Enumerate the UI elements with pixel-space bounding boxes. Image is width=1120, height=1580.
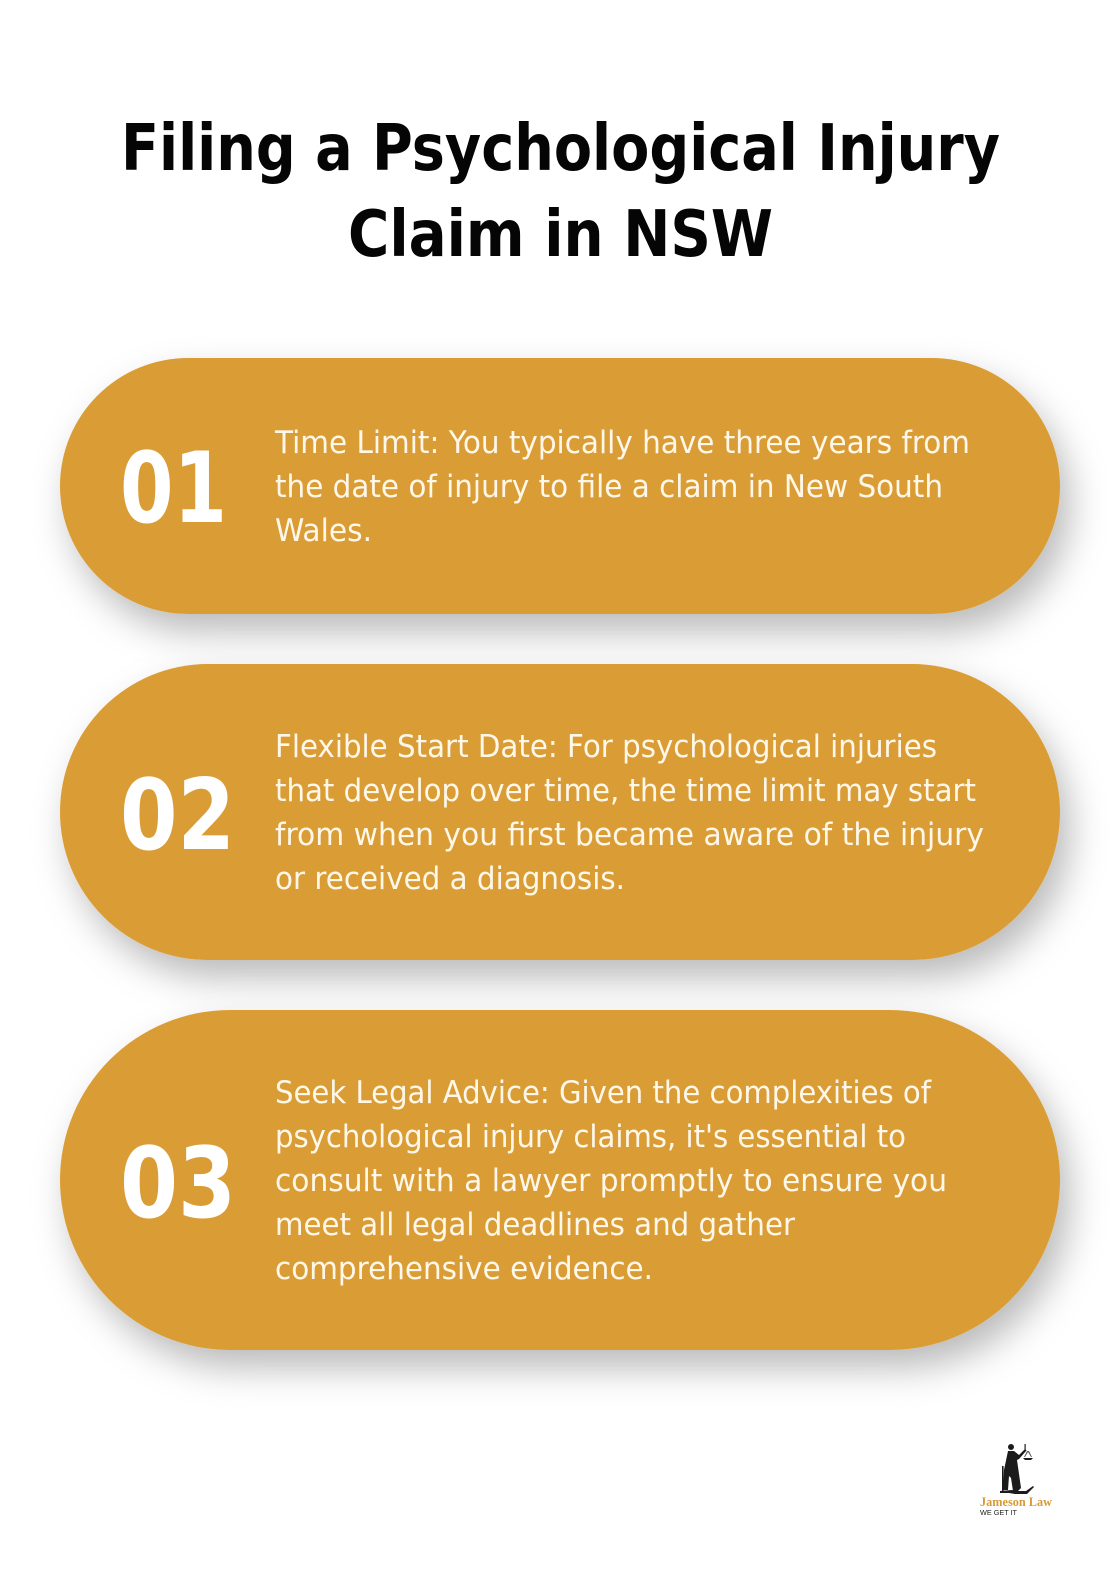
text block: time limit: Time Limit: You typically have three years from bbox=[274, 425, 970, 461]
text block: seek legal advice: psychological injury claims, it's essential to bbox=[275, 1119, 906, 1155]
logo name: Jameson Law bbox=[980, 1495, 1052, 1509]
text block: flexible start date: from when you first became aware of the injury bbox=[275, 817, 984, 853]
text block: flexible start date bbox=[275, 729, 984, 897]
text block: seek legal advice bbox=[275, 1075, 947, 1287]
title bbox=[121, 112, 1000, 272]
text block: flexible start date: Flexible Start Date: For psychological injuries bbox=[275, 729, 937, 765]
number 01: 01 bbox=[120, 432, 227, 546]
text block: flexible start date: or received a diagnosis. bbox=[275, 861, 625, 897]
text block: seek legal advice: comprehensive evidence. bbox=[275, 1251, 653, 1287]
text block: flexible start date: that develop over time, the time limit may start bbox=[275, 773, 976, 809]
text block: time limit bbox=[274, 425, 970, 549]
logo tagline: WE GET IT bbox=[980, 1508, 1017, 1517]
number 02: 02 bbox=[120, 759, 235, 873]
text block: seek legal advice: Seek Legal Advice: Given the complexities of bbox=[275, 1075, 932, 1111]
number 03: 03 bbox=[120, 1127, 236, 1241]
icon: lady justice bbox=[1000, 1444, 1034, 1494]
panel: step 01 time limit bbox=[60, 358, 1060, 614]
text block: seek legal advice: meet all legal deadlines and gather bbox=[275, 1207, 795, 1243]
text block: seek legal advice: consult with a lawyer promptly to ensure you bbox=[275, 1163, 947, 1199]
panel: step 02 flexible start date bbox=[60, 664, 1060, 960]
panel: step 03 seek legal advice bbox=[60, 1010, 1060, 1350]
title: Claim in NSW bbox=[348, 198, 773, 272]
title: Filing a Psychological Injury bbox=[121, 112, 1000, 186]
text block: time limit: the date of injury to file a claim in New South bbox=[275, 469, 943, 505]
text block: time limit: Wales. bbox=[275, 513, 372, 549]
logo: Jameson Law bbox=[980, 1444, 1052, 1517]
